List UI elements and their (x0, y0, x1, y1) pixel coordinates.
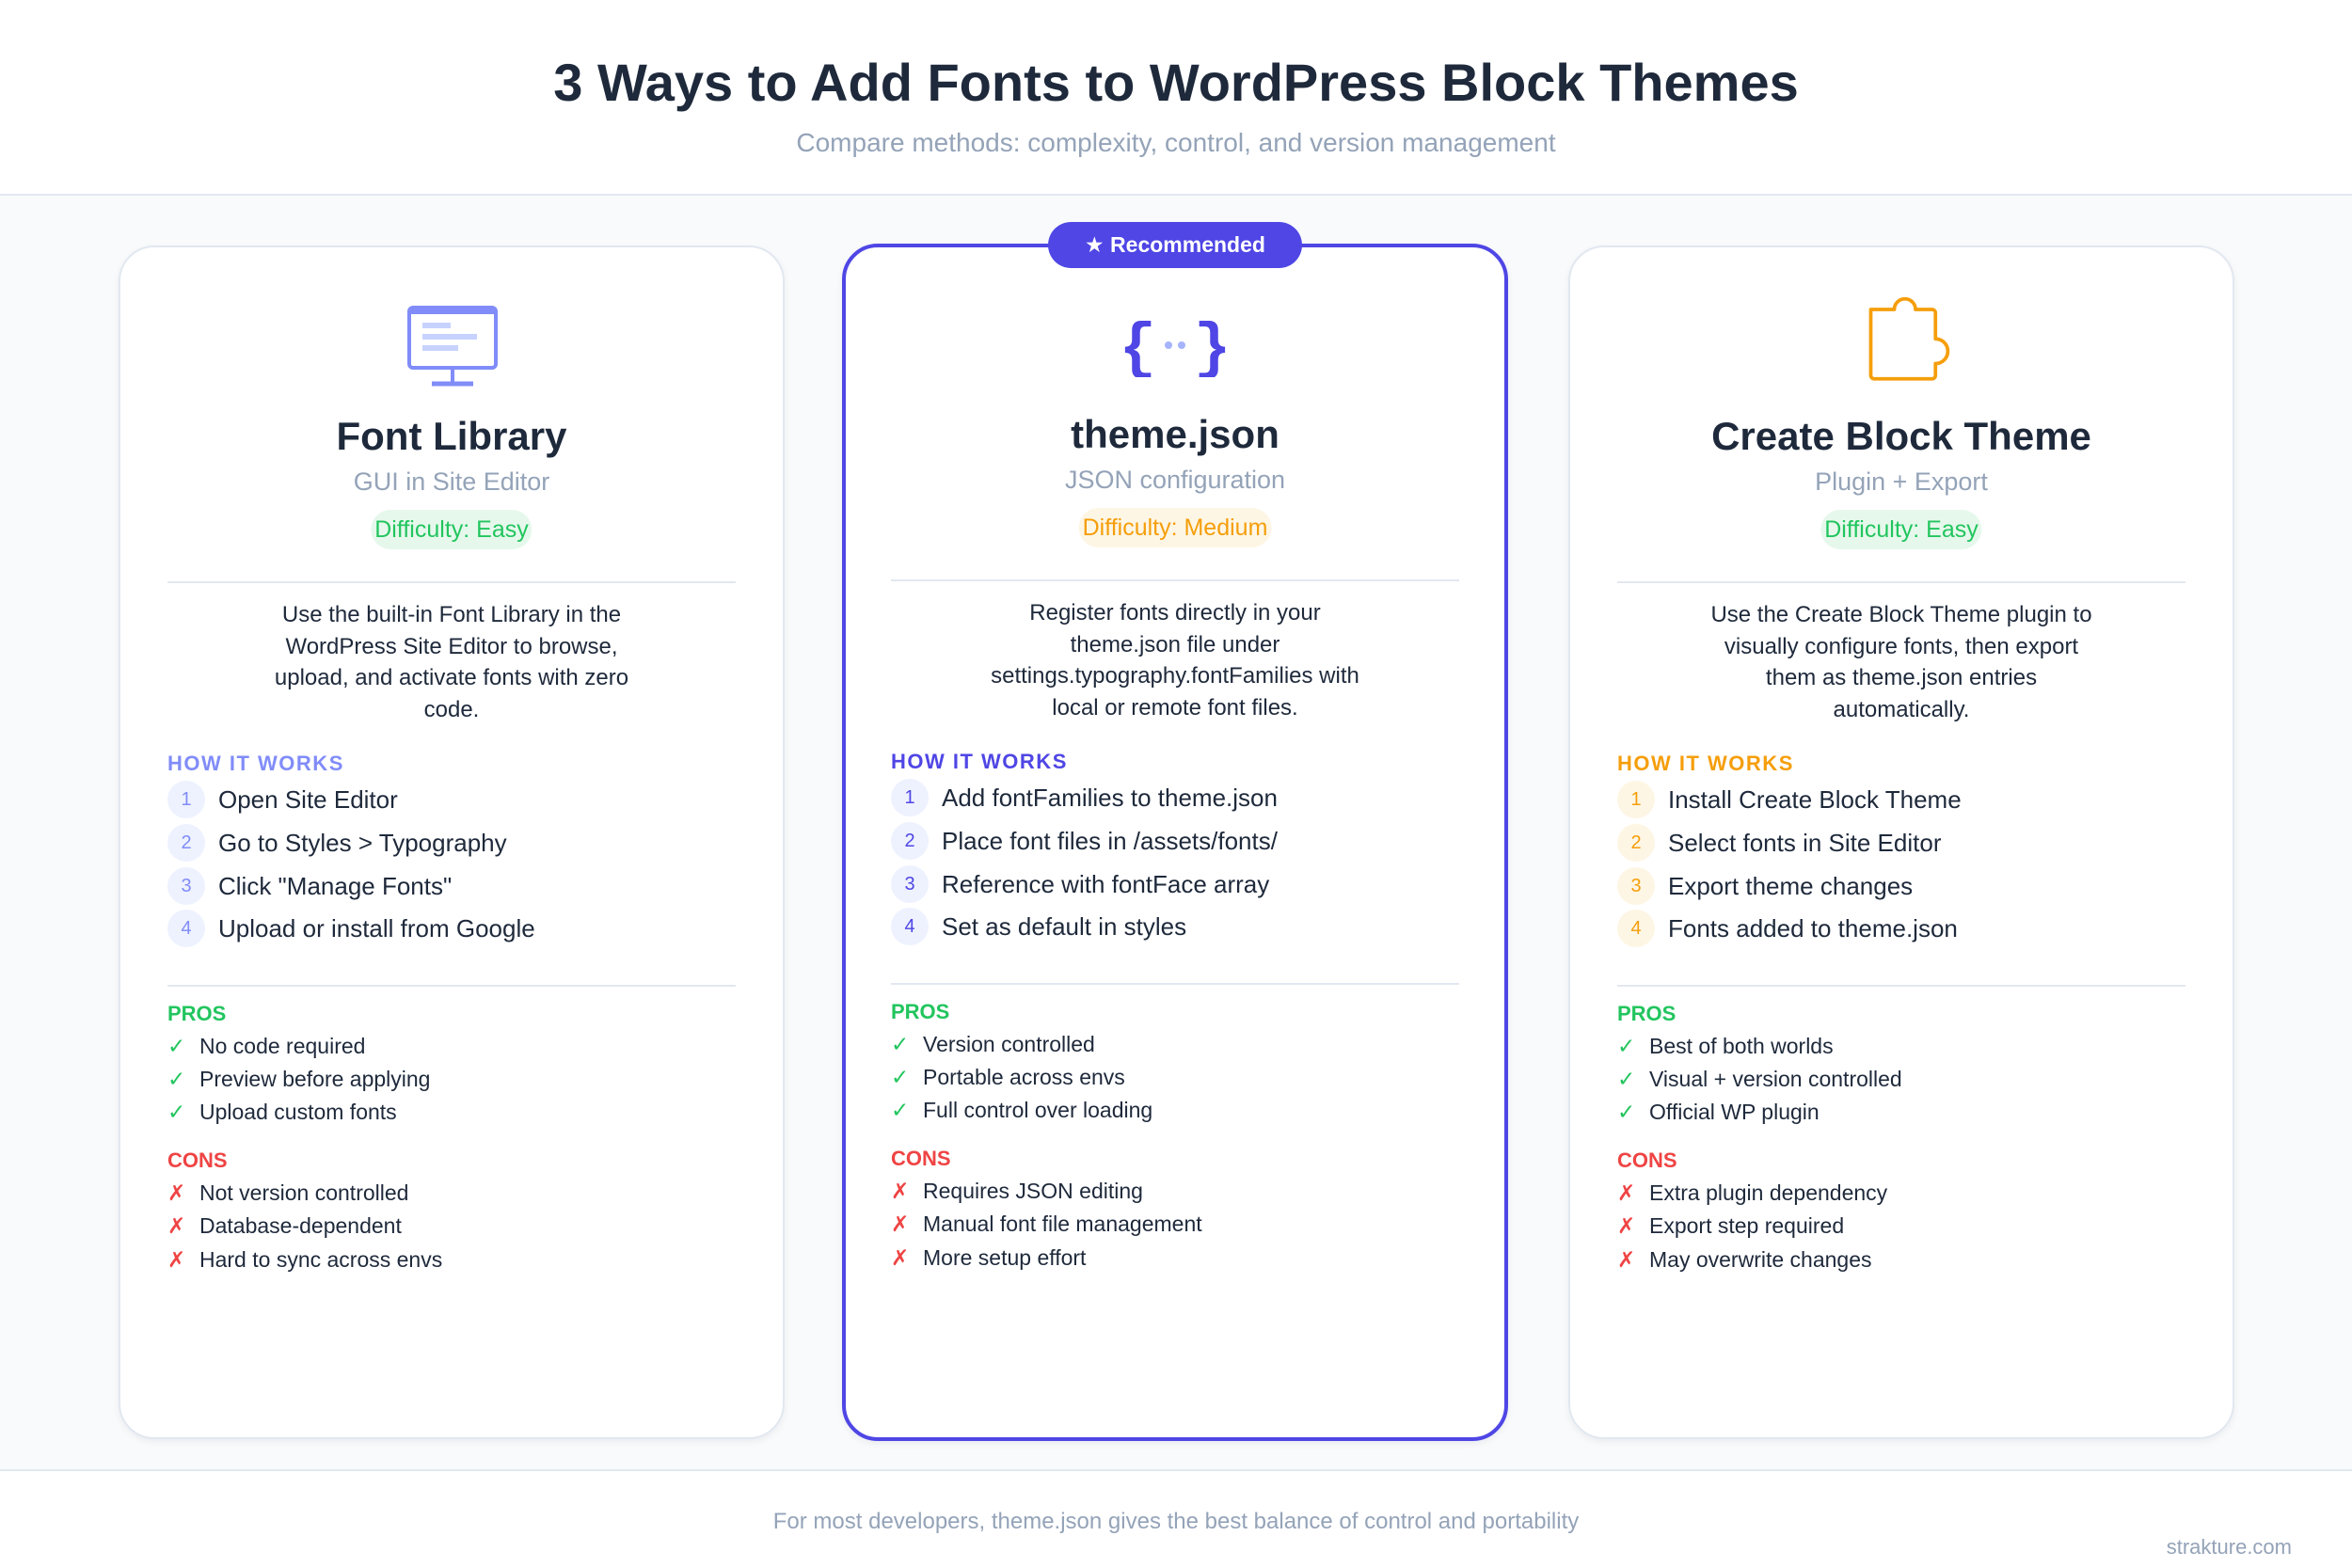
panel: Create Block Theme: Install Create Block Theme (1668, 785, 1962, 814)
panel: Font Library: CONS (167, 1148, 228, 1172)
panel: theme.json: 2 (904, 831, 915, 851)
panel: Create Block Theme: 4 (1630, 918, 1642, 939)
panel: theme.json: 4 (904, 916, 915, 937)
how it works: HOW IT WORKS (1617, 752, 1794, 775)
heading: theme.json (1071, 412, 1279, 456)
panel: Font Library: 1 (181, 789, 192, 810)
panel: theme.json: ✗ (891, 1245, 909, 1270)
panel: Create Block Theme: ✗ (1617, 1213, 1635, 1238)
icon: monitor (407, 306, 498, 386)
description: Register fonts directly in your theme.json file under settings.typography.fontFamilies with local or remote font files. (991, 600, 1359, 721)
recommended badge: ★ Recommended (1085, 232, 1265, 257)
panel: Font Library: ✗ (167, 1180, 185, 1205)
panel: Create Block Theme: ✗ (1617, 1180, 1635, 1205)
difficulty badge: Difficulty: Easy (374, 516, 529, 543)
footer note: For most developers, theme.json gives the best balance of control and portability (773, 1509, 1579, 1534)
panel: theme.json: Set as default in styles (942, 912, 1186, 941)
recommended badge (1048, 222, 1302, 268)
panel: theme.json: Requires JSON editing (923, 1179, 1143, 1203)
how it works: HOW IT WORKS (891, 750, 1068, 773)
cons (891, 1147, 1202, 1270)
pros (167, 1002, 430, 1124)
panel: Font Library: ✓ (167, 1034, 185, 1058)
panel: Font Library: ✓ (167, 1067, 185, 1091)
description: Use the Create Block Theme plugin to visually configure fonts, then export them as theme.json entries automatically. (1710, 602, 2092, 722)
panel: theme.json (842, 244, 1508, 1441)
description: Use the built-in Font Library in the WordPress Site Editor to browse, upload, and activate fonts with zero code. (275, 602, 628, 722)
panel: Font Library: Hard to sync across envs (199, 1247, 442, 1272)
panel: Create Block Theme: PROS (1617, 1002, 1676, 1025)
panel: Font Library: Click "Manage Fonts" (218, 872, 452, 900)
panel: theme.json: Reference with fontFace array (942, 870, 1269, 898)
panel: theme.json: ✓ (891, 1065, 909, 1089)
panel: Font Library: Open Site Editor (218, 785, 398, 814)
panel: theme.json: ✓ (891, 1098, 909, 1122)
footer (0, 1469, 2352, 1568)
panel: theme.json: Add fontFamilies to theme.json (942, 784, 1278, 812)
cons (167, 1148, 442, 1272)
difficulty badge (371, 510, 532, 549)
title: 3 Ways to Add Fonts to WordPress Block Themes (553, 53, 1799, 112)
panel: Create Block Theme: CONS (1617, 1148, 1677, 1172)
panel: Create Block Theme: May overwrite changes (1649, 1247, 1872, 1272)
difficulty badge (1820, 510, 1982, 549)
panel: Create Block Theme: Export step required (1649, 1213, 1844, 1238)
panel: theme.json: Manual font file management (923, 1212, 1202, 1236)
subheading: JSON configuration (1065, 466, 1285, 494)
panel: theme.json: More setup effort (923, 1245, 1086, 1270)
panel: Font Library: ✗ (167, 1213, 185, 1238)
difficulty badge: Difficulty: Easy (1824, 516, 1979, 543)
panel: Font Library: Upload custom fonts (199, 1100, 397, 1124)
panel: theme.json: CONS (891, 1147, 951, 1170)
panel: Font Library: 3 (181, 876, 192, 896)
panel: Font Library: ✓ (167, 1100, 185, 1124)
panel: Create Block Theme: Select fonts in Site Editor (1668, 829, 1941, 857)
icon: puzzle (1868, 297, 1949, 381)
pros (1617, 1002, 1902, 1124)
panel: Create Block Theme: 2 (1630, 832, 1642, 853)
panel: Create Block Theme: ✓ (1617, 1100, 1635, 1124)
difficulty badge: Difficulty: Medium (1083, 515, 1267, 541)
panel: Font Library: 2 (181, 832, 192, 853)
difficulty badge (1079, 508, 1271, 547)
panel: Create Block Theme: Extra plugin dependency (1649, 1180, 1887, 1205)
steps (891, 779, 1278, 945)
subheading: Plugin + Export (1815, 467, 1988, 496)
panel: Create Block Theme: Official WP plugin (1649, 1100, 1820, 1124)
panel: Font Library: PROS (167, 1002, 226, 1025)
panel: Create Block Theme: Fonts added to theme.json (1668, 914, 1958, 942)
heading: Font Library (336, 414, 566, 458)
panel: theme.json: 3 (904, 874, 915, 895)
header (0, 0, 2352, 196)
panel: Create Block Theme: ✓ (1617, 1067, 1635, 1091)
panel: theme.json: Full control over loading (923, 1098, 1152, 1122)
panel: Font Library: Database-dependent (199, 1213, 402, 1238)
panel: Create Block Theme: 1 (1630, 789, 1642, 810)
cons (1617, 1148, 1887, 1272)
panel: Font Library: Upload or install from Google (218, 914, 535, 942)
panel: theme.json: Place font files in /assets/fonts/ (942, 827, 1278, 855)
panel: Create Block Theme (1568, 245, 2234, 1439)
heading: Create Block Theme (1711, 414, 2091, 458)
panel: theme.json: ✗ (891, 1212, 909, 1236)
panel: Font Library: ✗ (167, 1247, 185, 1272)
panel: Create Block Theme: 3 (1630, 876, 1642, 896)
panel: Create Block Theme: Best of both worlds (1649, 1034, 1834, 1058)
panel: Font Library: Go to Styles > Typography (218, 829, 507, 857)
subheading: GUI in Site Editor (354, 467, 549, 496)
panel: theme.json: ✓ (891, 1032, 909, 1056)
subtitle: Compare methods: complexity, control, and version management (796, 128, 1556, 157)
panel: Font Library (119, 245, 785, 1439)
panel: Font Library: 4 (181, 918, 192, 939)
panel: theme.json: 1 (904, 787, 915, 808)
panel: Font Library: Preview before applying (199, 1067, 430, 1091)
credit: strakture.com (2167, 1535, 2292, 1559)
panel: Create Block Theme: ✓ (1617, 1034, 1635, 1058)
panel: theme.json: Version controlled (923, 1032, 1095, 1056)
steps (1617, 781, 1962, 947)
panel: Create Block Theme: ✗ (1617, 1247, 1635, 1272)
pros (891, 1000, 1152, 1122)
panel: theme.json: ✗ (891, 1179, 909, 1203)
panel: Font Library: Not version controlled (199, 1180, 408, 1205)
steps (167, 781, 535, 947)
panel: Font Library: No code required (199, 1034, 365, 1058)
panel: theme.json: Portable across envs (923, 1065, 1125, 1089)
panel: Create Block Theme: Export theme changes (1668, 872, 1913, 900)
how it works: HOW IT WORKS (167, 752, 344, 775)
panel: theme.json: PROS (891, 1000, 949, 1023)
panel: Create Block Theme: Visual + version controlled (1649, 1067, 1902, 1091)
